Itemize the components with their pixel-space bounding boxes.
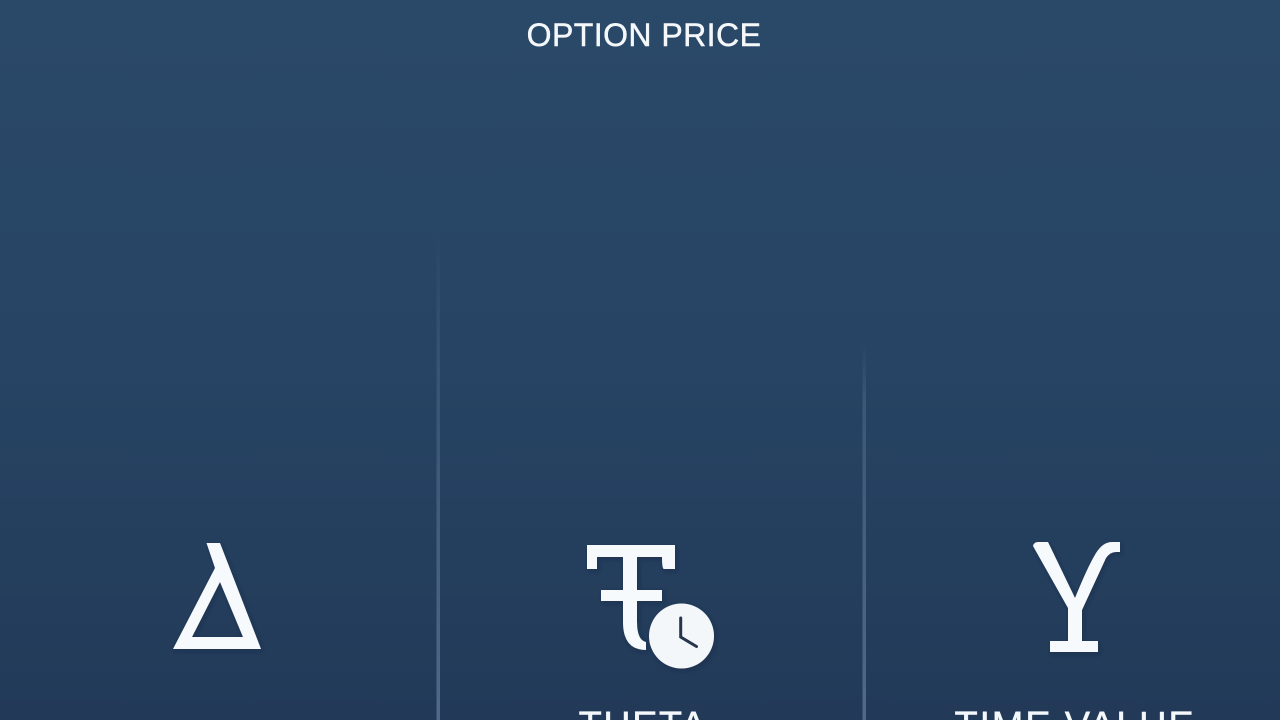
icon: gamma symbol xyxy=(1033,542,1120,652)
theta glyph xyxy=(587,545,675,650)
title: OPTION PRICE xyxy=(527,17,761,53)
clock face xyxy=(649,604,714,668)
icon: theta symbol with clock xyxy=(587,545,714,668)
divider: left xyxy=(436,230,440,720)
divider: right xyxy=(862,345,866,720)
icon: delta symbol xyxy=(173,543,261,649)
